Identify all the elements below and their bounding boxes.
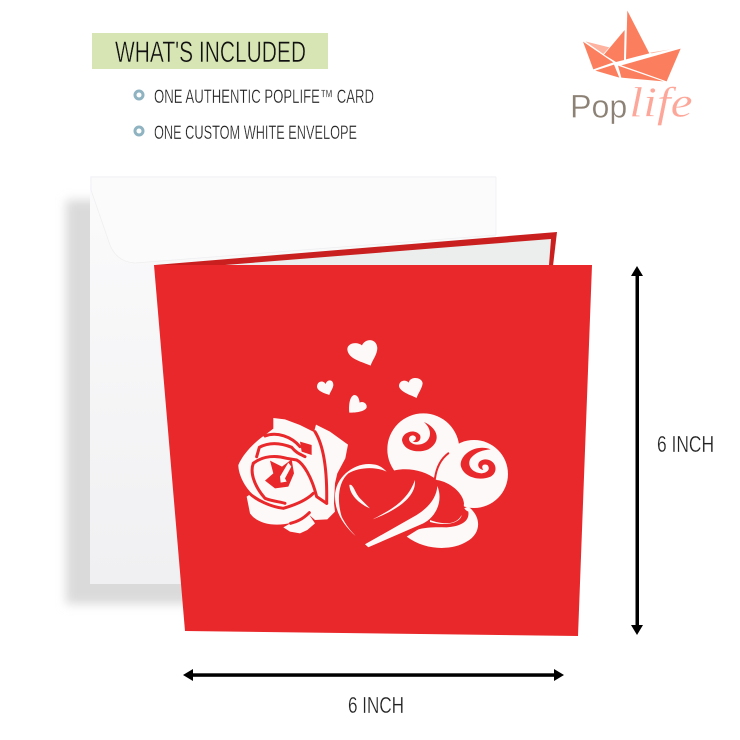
pop-up artwork — [238, 340, 508, 548]
logo wordmark: pop: Pop — [570, 88, 627, 124]
lower heart line — [430, 515, 462, 524]
red heart body — [335, 465, 468, 548]
dimension arrow: height — [631, 266, 643, 635]
list item: envelope — [135, 123, 357, 144]
logo wordmark: life: life — [629, 80, 693, 127]
dimension arrow: width — [183, 669, 564, 681]
card back panel — [155, 232, 557, 266]
logo: poplife — [570, 11, 693, 127]
lower heart rim — [407, 507, 478, 548]
heart highlight — [349, 485, 370, 508]
envelope — [90, 176, 496, 584]
heart band — [365, 486, 440, 547]
candy swirls — [402, 422, 496, 479]
chocolate hearts — [335, 464, 478, 548]
heading: what's included: WHAT'S INCLUDED — [115, 36, 306, 69]
heart inner line — [373, 480, 415, 519]
envelope flap — [91, 177, 496, 263]
heart outline crescent — [335, 464, 387, 536]
candies — [387, 413, 508, 508]
dimension label: height: 6 INCH — [657, 431, 714, 457]
heading: what's included — [92, 33, 328, 69]
card front — [154, 265, 592, 636]
envelope shadow — [66, 200, 406, 604]
logo boat icon — [583, 11, 681, 81]
list item: envelope: ONE CUSTOM WHITE ENVELOPE — [154, 123, 357, 144]
hearts — [317, 340, 423, 413]
dimension label: width: 6 INCH — [348, 692, 404, 718]
rose — [238, 418, 348, 533]
list item: card — [135, 87, 374, 108]
list item: card: ONE AUTHENTIC POPLIFE™ CARD — [154, 87, 374, 108]
